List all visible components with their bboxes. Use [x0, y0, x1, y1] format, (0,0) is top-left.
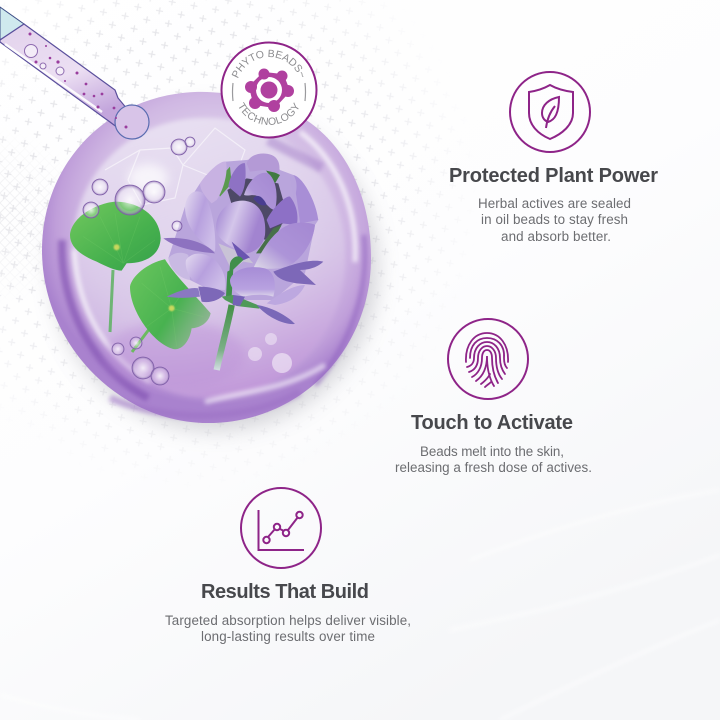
top center petal: [244, 173, 277, 210]
heading: Results That Build: [201, 581, 369, 603]
molecule lines: [105, 128, 245, 205]
far right petal: [293, 175, 318, 223]
dropper glass tip: [0, 7, 24, 40]
leaf two: [130, 259, 211, 349]
flower: [163, 153, 323, 370]
panel: touch to activate: [395, 319, 592, 475]
body text: [165, 613, 411, 644]
badge: Phyto Beads Technology: [220, 42, 318, 138]
body text: Herbal actives are sealed: [478, 196, 631, 211]
right big petal: [253, 223, 315, 269]
far lower left petal: [168, 253, 190, 280]
lower right petal: [267, 285, 305, 305]
left sepal: [163, 238, 215, 253]
left back petal: [200, 162, 227, 203]
body text: [395, 444, 592, 475]
body text: Beads melt into the skin,: [420, 444, 564, 459]
bubbles: [83, 137, 292, 385]
back top petal: [247, 153, 279, 173]
body text: [478, 196, 631, 244]
lower center petal: [230, 267, 275, 297]
stem: [217, 305, 232, 370]
heading: Protected Plant Power: [449, 165, 658, 187]
panel: results that build: [165, 488, 411, 644]
stem of leaf two: [132, 328, 150, 352]
central green stalk: [226, 256, 243, 297]
top left petal: [228, 163, 246, 197]
flower silhouette base: [168, 155, 318, 300]
lower right sepal: [257, 305, 295, 324]
sparkle: [128, 164, 168, 192]
icon: line chart: [241, 488, 321, 568]
lower left petal: [186, 254, 226, 290]
leaf one: [70, 202, 161, 271]
calyx: [222, 295, 260, 309]
center bloom shadow: [218, 243, 253, 270]
center petal: [216, 201, 265, 253]
badge text: TECHNOLOGY: [239, 102, 298, 125]
body text: releasing a fresh dose of actives.: [395, 460, 592, 475]
right sepal: [273, 261, 323, 285]
drop inner rim: [62, 118, 365, 416]
right upper petal: [267, 197, 298, 228]
stem of leaf one: [110, 270, 113, 332]
body text: Targeted absorption helps deliver visible,: [165, 613, 411, 628]
drop shadow: [53, 106, 377, 430]
badge text: PHYTO BEADS~: [232, 50, 304, 78]
foliage and dark core: [227, 178, 288, 240]
dropper tube: [0, 24, 128, 128]
icon: fingerprint: [448, 319, 528, 399]
dropper: [0, 7, 149, 139]
panel: protected plant power: [449, 72, 658, 244]
heading: Touch to Activate: [411, 412, 573, 434]
lower left sepals: [167, 288, 200, 298]
left tall petal: [185, 191, 215, 252]
drop body: [42, 92, 371, 423]
dropper bulb: [115, 105, 149, 139]
body text: long-lasting results over time: [201, 629, 375, 644]
badge text: [232, 50, 304, 125]
badge molecule icon: [245, 68, 294, 112]
body text: and absorb better.: [501, 229, 611, 244]
body text: in oil beads to stay fresh: [481, 212, 628, 227]
icon: shield with leaf: [510, 72, 590, 152]
dropper bubbles and dots: [24, 32, 128, 128]
liquid drop with botanicals: [42, 92, 377, 430]
